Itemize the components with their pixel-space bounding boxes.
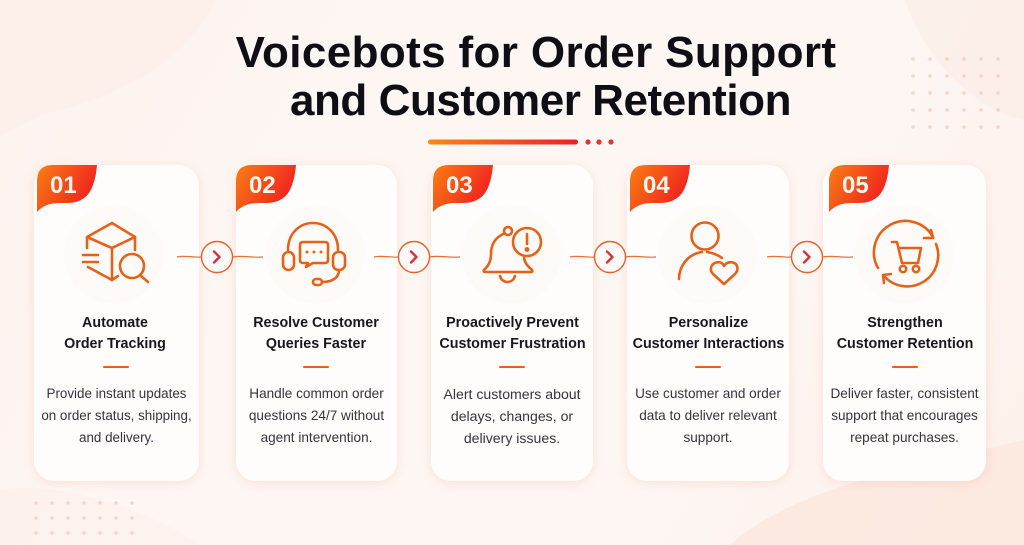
step number badge 01 — [37, 165, 97, 212]
description — [635, 386, 781, 445]
heading: Order Tracking — [64, 336, 166, 352]
panel: step 3 proactively prevent frustration — [428, 164, 596, 486]
panel: step 2 resolve customer queries — [233, 164, 400, 486]
description — [443, 386, 581, 446]
description: delays, changes, or — [451, 408, 573, 424]
title — [236, 28, 836, 125]
title: and Customer Retention — [290, 76, 791, 125]
number 01: 01 — [50, 172, 77, 199]
heading: Customer Retention — [837, 336, 973, 352]
heading — [64, 315, 166, 352]
icon: bell with alert — [482, 226, 542, 284]
title: Voicebots for Order Support — [236, 28, 836, 77]
icon: box with magnifier — [82, 222, 150, 284]
description: repeat purchases. — [850, 430, 959, 445]
heading: Customer Frustration — [439, 336, 586, 352]
description: agent intervention. — [261, 430, 372, 445]
step number badge 03 — [433, 165, 493, 212]
arrow connector 3 — [570, 240, 656, 274]
heading: Proactively Prevent — [446, 315, 579, 331]
description: support that encourages — [831, 408, 978, 423]
description — [830, 386, 979, 445]
heading — [253, 315, 379, 352]
arrow connector 2 — [374, 240, 460, 274]
number 02: 02 — [249, 172, 276, 199]
heading: Queries Faster — [266, 336, 366, 352]
number 03: 03 — [446, 172, 473, 199]
description: Handle common order — [249, 386, 384, 401]
number 04: 04 — [643, 172, 670, 199]
description: Deliver faster, consistent — [830, 386, 979, 401]
title underline with dots — [428, 139, 614, 145]
step number badge 04 — [630, 165, 690, 212]
description: support. — [683, 430, 733, 445]
description — [249, 386, 384, 445]
heading: Customer Interactions — [633, 336, 784, 352]
panel: step 4 personalize interactions — [624, 164, 792, 486]
description: questions 24/7 without — [249, 408, 384, 423]
description: Use customer and order — [635, 386, 781, 401]
heading: Strengthen — [867, 315, 943, 331]
heading: Automate — [82, 315, 148, 331]
heading: Personalize — [669, 315, 748, 331]
step number badge 02 — [236, 165, 296, 212]
description — [41, 386, 192, 445]
description: Alert customers about — [443, 386, 581, 402]
description: on order status, shipping, — [41, 408, 192, 423]
icon: person with heart — [678, 221, 739, 286]
arrow connector 1 — [176, 240, 263, 274]
description: data to deliver relevant — [639, 408, 777, 423]
number 05: 05 — [842, 172, 869, 199]
description: delivery issues. — [464, 430, 560, 446]
heading — [439, 315, 586, 352]
heading: Resolve Customer — [253, 315, 379, 331]
step number badge 05 — [829, 165, 889, 212]
description: Provide instant updates — [47, 386, 186, 401]
icon: headset with chat — [282, 222, 346, 286]
panel: step 1 automate order tracking — [31, 164, 202, 486]
arrow connector 4 — [766, 240, 853, 274]
heading — [633, 315, 784, 352]
heading — [837, 315, 973, 352]
icon: cart with circular arrows — [872, 220, 940, 288]
description: and delivery. — [79, 430, 154, 445]
